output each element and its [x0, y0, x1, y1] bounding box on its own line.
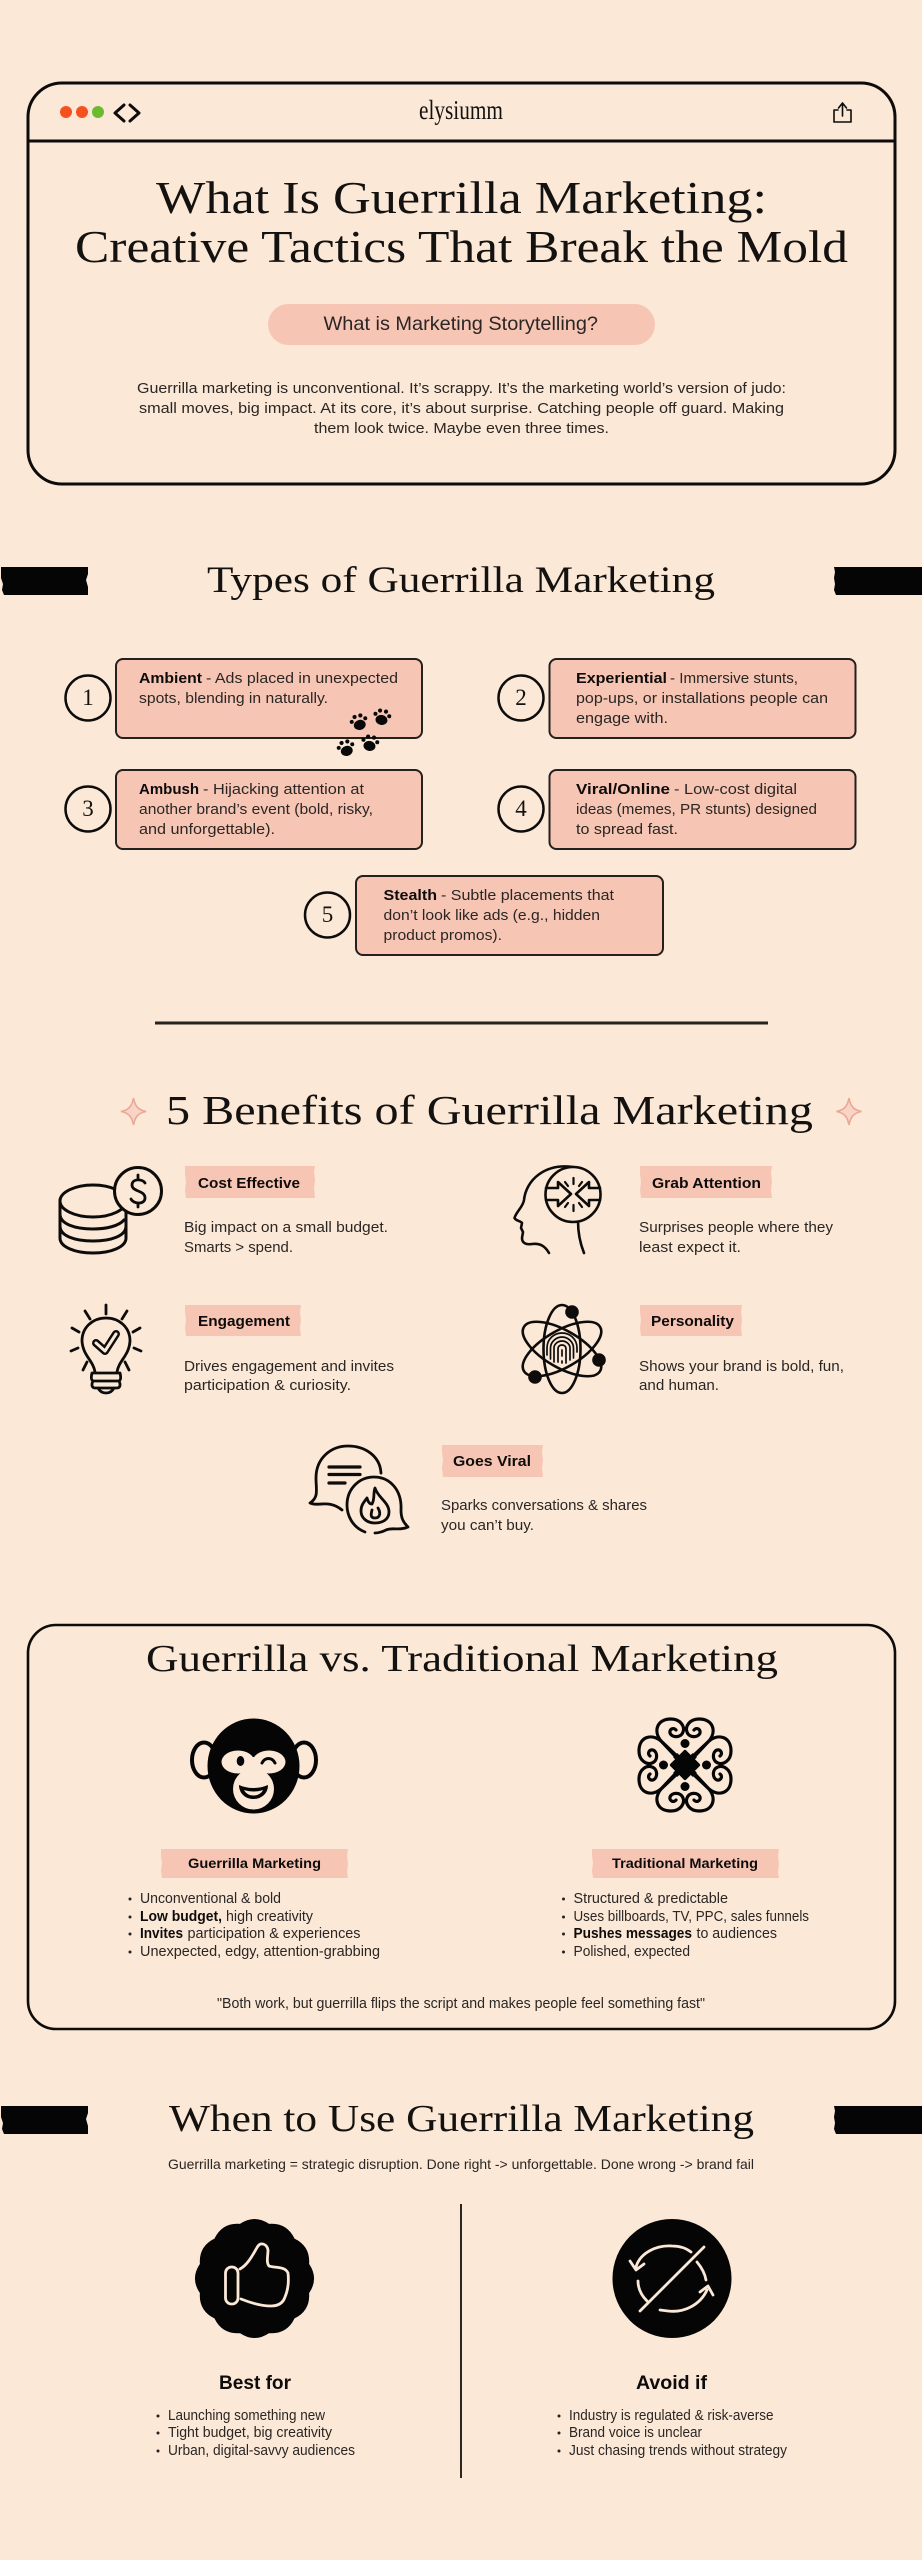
card 1: ambient: - Ads placed in unexpected — [206, 670, 398, 687]
column: guerrilla marketing — [128, 1849, 380, 1960]
benefit: grab attention: Grab Attention — [652, 1176, 761, 1192]
icon: share — [834, 103, 851, 122]
column: guerrilla marketing: Invites — [140, 1926, 183, 1942]
logo: elysiumm: elysiumm — [419, 95, 503, 125]
column: best for — [156, 2219, 355, 2459]
card 2: experiential: engage with. — [576, 710, 668, 727]
benefit: personality — [515, 1305, 844, 1394]
heading: when to use with tape: When to Use Guerrilla Marketing — [169, 2098, 754, 2140]
quote: "Both work, but guerrilla flips the script and makes people feel something fast" — [217, 1996, 705, 2012]
card 5: stealth: - Subtle placements that — [441, 887, 615, 904]
icon: coins — [60, 1168, 162, 1253]
heading: when to use with tape — [1, 2098, 922, 2140]
intro paragraph: Guerrilla marketing is unconventional. It’s scrappy. It’s the marketing world’s version of judo: — [137, 380, 786, 397]
title: What Is Guerrilla Marketing: — [156, 173, 767, 223]
card 3: ambush — [66, 770, 422, 849]
icon: head with focus arrows — [514, 1166, 600, 1253]
title: Creative Tactics That Break the Mold — [75, 222, 848, 272]
icon: atom fingerprint — [515, 1305, 609, 1393]
benefit: grab attention: Surprises people where they — [639, 1219, 834, 1236]
icon: ornament — [639, 1719, 731, 1811]
subtitle pill — [268, 304, 655, 345]
benefit: cost effective: Big impact on a small budget. — [184, 1219, 388, 1236]
card 2: experiential — [498, 659, 856, 738]
column: traditional marketing: Pushes messages — [574, 1926, 692, 1942]
benefit: goes viral: you can’t buy. — [441, 1517, 534, 1534]
number 1: 1 — [82, 685, 94, 710]
card 3: ambush: and unforgettable). — [139, 821, 275, 838]
column: avoid if — [558, 2219, 788, 2459]
icon: chat bubbles with flame — [310, 1446, 408, 1533]
column: guerrilla marketing: Low budget, — [140, 1909, 222, 1925]
card 5: stealth: product promos). — [384, 927, 502, 944]
number 3 — [66, 786, 110, 832]
heading: Guerrilla vs. Traditional Marketing — [146, 1638, 778, 1680]
card 3: ambush: another brand’s event (bold, risky, — [139, 801, 373, 818]
card 4: viral online — [498, 770, 856, 849]
column: traditional marketing: Polished, expected — [574, 1944, 690, 1960]
column: guerrilla marketing: Unexpected, edgy, attention-grabbing — [140, 1944, 380, 1960]
subtitle pill: What is Marketing Storytelling? — [324, 313, 598, 335]
number 4 — [498, 786, 544, 832]
card 1: ambient: spots, blending in naturally. — [139, 690, 328, 707]
benefit: grab attention: least expect it. — [639, 1239, 741, 1256]
icon: sparkle left — [121, 1098, 146, 1125]
benefit: cost effective — [60, 1166, 388, 1256]
column: traditional marketing: to audiences — [696, 1926, 777, 1942]
icon: no refresh circle — [612, 2219, 732, 2338]
card 3: ambush: - Hijacking attention at — [203, 781, 365, 798]
column: traditional marketing: Traditional Marketing — [612, 1855, 758, 1871]
tag — [442, 1445, 543, 1477]
benefit: goes viral: Goes Viral — [453, 1454, 531, 1470]
intro paragraph: them look twice. Maybe even three times. — [314, 420, 609, 437]
benefit: engagement: participation & curiosity. — [184, 1377, 351, 1394]
card 4: viral online: to spread fast. — [576, 821, 678, 838]
list: Tight budget, big creativity — [168, 2425, 333, 2441]
number 2 — [498, 676, 544, 720]
icon: paw prints — [335, 707, 392, 758]
title — [75, 173, 848, 272]
benefit: personality: Personality — [651, 1314, 734, 1330]
heading: types section with tape: Types of Guerrilla Marketing — [207, 560, 715, 601]
label: Best for — [219, 2373, 292, 2394]
card 1: ambient: Ambient — [139, 670, 202, 687]
column: traditional marketing — [562, 1849, 809, 1960]
benefit: cost effective: Cost Effective — [198, 1176, 300, 1192]
panel: guerrilla vs traditional — [28, 1625, 895, 2029]
column: traditional marketing: Structured & predictable — [574, 1891, 728, 1907]
list — [558, 2408, 788, 2459]
list: Launching something new — [168, 2408, 325, 2424]
tag — [640, 1305, 742, 1336]
list — [156, 2408, 355, 2459]
column: guerrilla marketing: high creativity — [226, 1909, 314, 1925]
benefit: goes viral: Sparks conversations & shares — [441, 1497, 647, 1514]
number 5: 5 — [322, 902, 333, 927]
icon: window dots — [60, 106, 104, 118]
subheading: Guerrilla marketing = strategic disruption. Done right -> unforgettable. Done wrong -> brand fail — [168, 2156, 754, 2172]
icon: thumbs up badge — [195, 2219, 314, 2338]
list: Brand voice is unclear — [569, 2425, 702, 2441]
benefit: engagement: Drives engagement and invites — [184, 1358, 394, 1375]
number 1 — [66, 676, 110, 720]
list: Just chasing trends without strategy — [569, 2443, 788, 2459]
list: Industry is regulated & risk-averse — [569, 2408, 774, 2424]
card 4: viral online: ideas (memes, PR stunts) designed — [576, 801, 817, 818]
column: guerrilla marketing: participation & experiences — [188, 1926, 360, 1942]
benefit: personality: Shows your brand is bold, fun, — [639, 1358, 844, 1375]
card 5: stealth: Stealth — [384, 887, 437, 904]
panel: browser window intro — [28, 83, 895, 484]
benefit: personality: and human. — [639, 1377, 719, 1394]
number 2: 2 — [515, 685, 527, 710]
tag — [640, 1166, 772, 1198]
list: Urban, digital-savvy audiences — [168, 2443, 355, 2459]
benefit: engagement — [71, 1305, 394, 1394]
column: traditional marketing: Uses billboards, TV, PPC, sales funnels — [574, 1909, 809, 1925]
heading: types section with tape — [1, 560, 922, 601]
number 5 — [305, 892, 350, 938]
heading: benefits with sparkles: 5 Benefits of Guerrilla Marketing — [166, 1087, 813, 1133]
card 4: viral online: - Low-cost digital — [674, 781, 797, 798]
card 3: ambush: Ambush — [139, 781, 199, 798]
icon: winking monkey — [192, 1718, 316, 1814]
card 4: viral online: Viral/Online — [576, 781, 670, 798]
intro paragraph: small moves, big impact. At its core, it’s about surprise. Catching people off guard. Making — [139, 400, 784, 417]
card 1: ambient — [66, 659, 422, 738]
column: guerrilla marketing: Guerrilla Marketing — [188, 1855, 321, 1871]
icon: code chevrons — [115, 105, 139, 121]
intro paragraph — [137, 380, 786, 437]
tag — [185, 1305, 301, 1336]
tag — [185, 1166, 315, 1198]
benefit: engagement: Engagement — [198, 1314, 290, 1330]
card 5: stealth: don’t look like ads (e.g., hidden — [384, 907, 600, 924]
card 5: stealth — [305, 876, 663, 955]
number 4: 4 — [515, 796, 527, 821]
number 3: 3 — [82, 796, 94, 821]
benefit: grab attention — [514, 1166, 834, 1256]
column: guerrilla marketing: Unconventional & bold — [140, 1891, 281, 1907]
card 2: experiential: Experiential — [576, 670, 667, 687]
benefit: goes viral — [310, 1445, 647, 1534]
label: Avoid if — [636, 2373, 708, 2394]
benefit: cost effective: Smarts > spend. — [184, 1239, 293, 1256]
icon: sparkle right — [836, 1098, 862, 1125]
card 2: experiential: pop-ups, or installations people can — [576, 690, 828, 707]
card 2: experiential: - Immersive stunts, — [670, 670, 798, 687]
icon: light bulb — [71, 1305, 141, 1393]
